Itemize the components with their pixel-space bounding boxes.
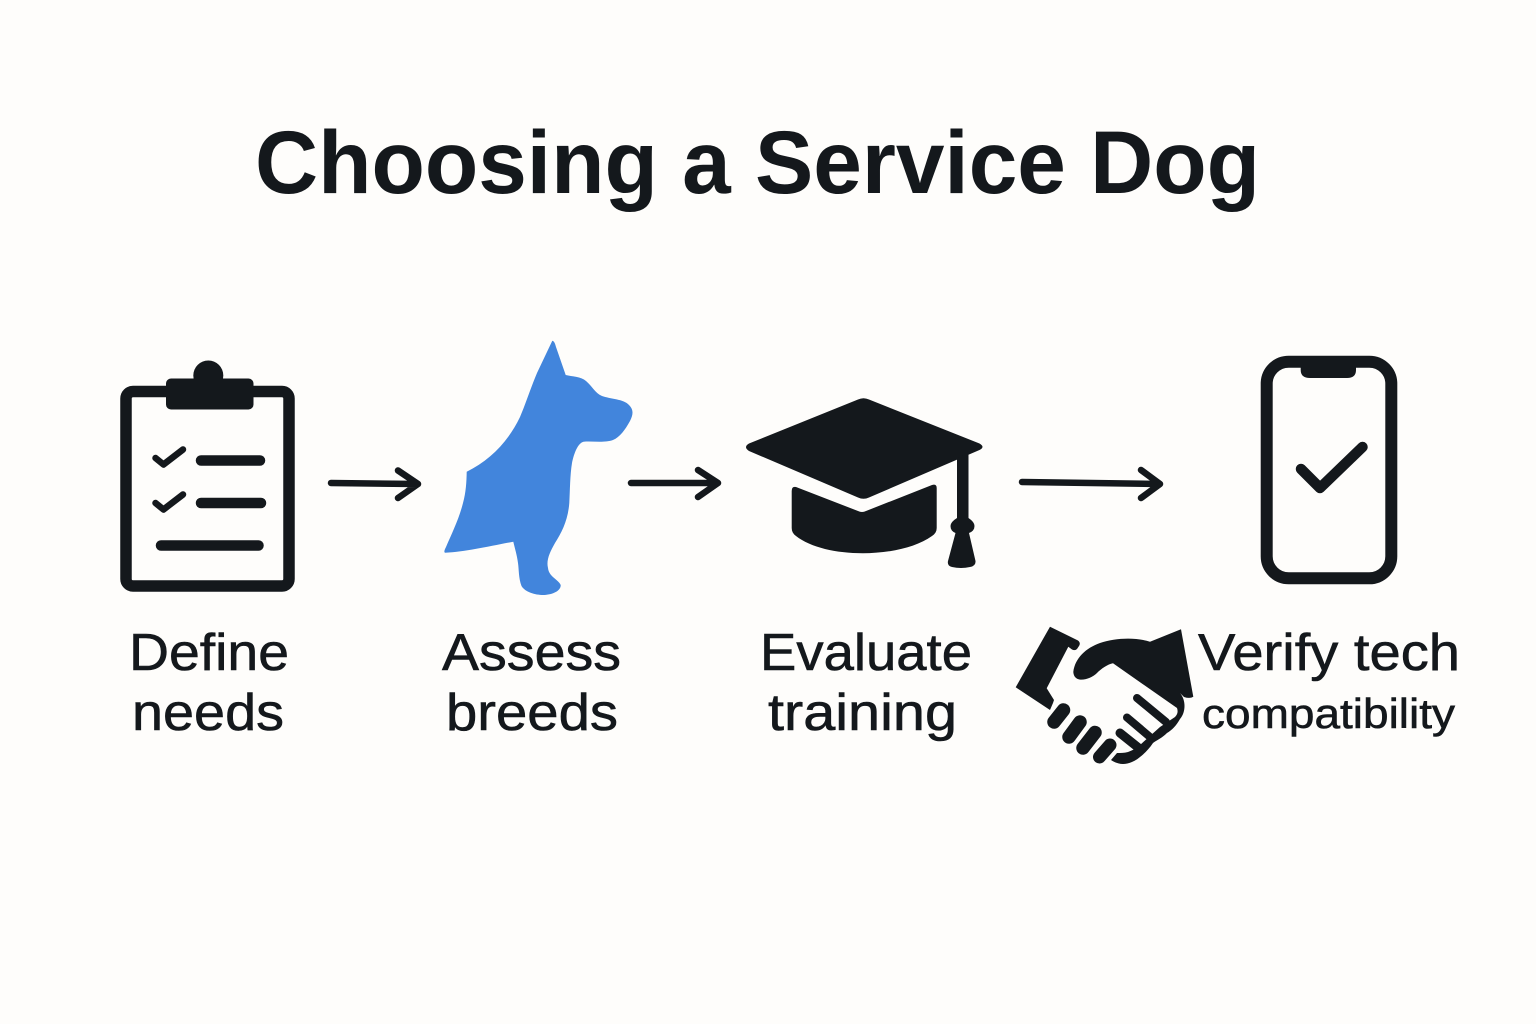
label: evaluate training: training [768,684,957,742]
label: define needs [129,624,289,742]
label: evaluate training [760,624,972,742]
title: Choosing a Service Dog [255,112,1260,212]
label: verify tech compatibility: Verify tech [1198,624,1460,682]
label: assess breeds: Assess [442,624,621,682]
icon: clipboard checklist [126,360,289,586]
label: evaluate training: Evaluate [760,624,972,682]
label: verify tech compatibility: compatibility [1202,690,1455,737]
arrow: assess to evaluate [631,470,718,497]
icon: handshake [1016,627,1193,764]
arrow: define to assess [331,470,418,498]
icon: blue dog silhouette [444,341,632,595]
label: verify tech compatibility [1198,624,1460,737]
arrow: evaluate to verify [1022,470,1160,498]
label: assess breeds [442,624,621,742]
label: define needs: needs [132,684,284,742]
label: assess breeds: breeds [446,684,618,742]
label: define needs: Define [129,624,289,682]
icon: smartphone with check [1267,360,1391,578]
icon: graduation cap [746,398,982,568]
